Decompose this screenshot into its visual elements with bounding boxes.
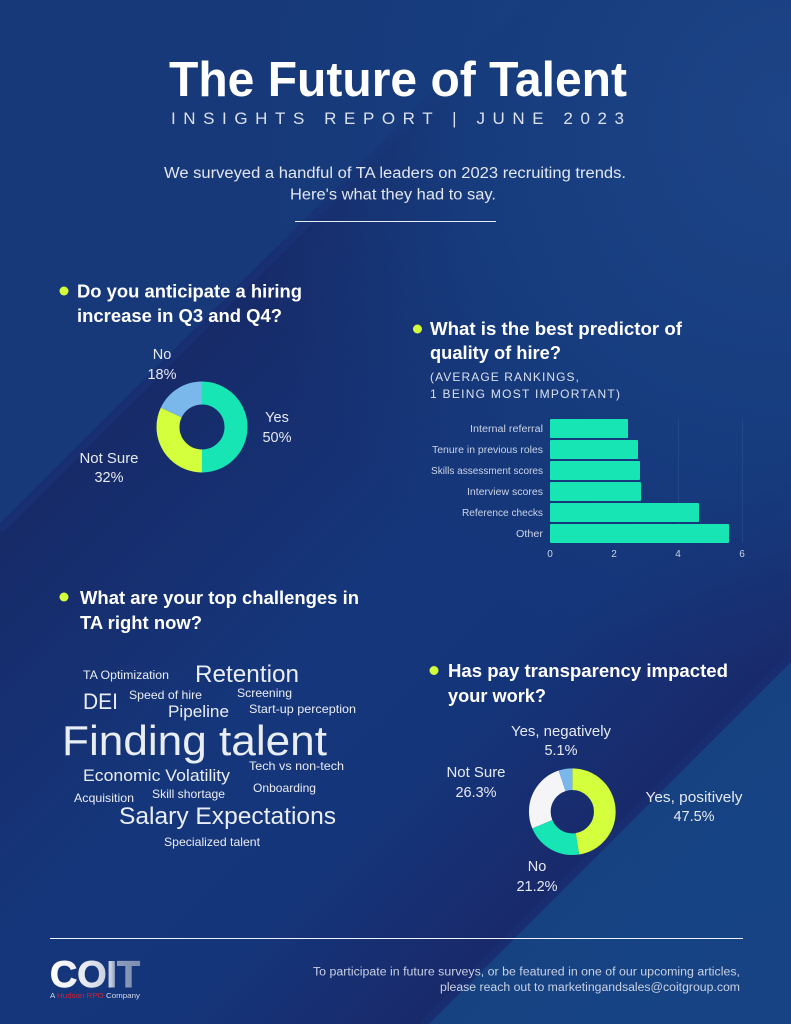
footer divider xyxy=(50,938,743,939)
bar chart: 0 xyxy=(547,549,553,560)
word cloud: Economic Volatility xyxy=(83,766,231,785)
labels: No xyxy=(528,859,546,875)
note: 1 BEING MOST IMPORTANT) xyxy=(430,387,620,401)
bullet xyxy=(60,592,68,602)
word cloud: Tech vs non-tech xyxy=(249,759,344,773)
logo wordmark: COIT xyxy=(50,954,140,995)
intro text xyxy=(164,165,626,204)
word cloud: Onboarding xyxy=(253,781,316,795)
labels: Yes, positively xyxy=(646,790,743,806)
note: (AVERAGE RANKINGS, xyxy=(430,370,579,384)
bar chart: Interview scores xyxy=(467,487,543,498)
heading: Do you anticipate a hiring xyxy=(77,282,302,302)
labels: 26.3% xyxy=(455,785,497,801)
word cloud: Skill shortage xyxy=(152,787,225,801)
bullet xyxy=(60,286,68,296)
bar chart: Tenure in previous roles xyxy=(432,445,543,456)
intro text: We surveyed a handful of TA leaders on 2023 recruiting trends. xyxy=(164,165,626,182)
bullet xyxy=(430,666,438,675)
bar chart: Internal referral xyxy=(470,424,543,435)
labels: 47.5% xyxy=(673,809,715,825)
heading: TA right now? xyxy=(80,613,202,633)
labels xyxy=(80,347,292,486)
bar chart: Skills assessment scores xyxy=(431,466,543,477)
bar chart xyxy=(431,419,745,560)
labels: 5.1% xyxy=(544,743,578,759)
logo xyxy=(50,954,140,1000)
word cloud: Specialized talent xyxy=(164,835,261,849)
footer text: To participate in future surveys, or be featured in one of our upcoming articles, xyxy=(313,966,740,978)
panel: hiring increase xyxy=(60,282,302,486)
labels: Not Sure xyxy=(446,765,506,781)
title: The Future of Talent xyxy=(169,53,627,107)
bar chart: Other xyxy=(516,529,544,540)
word cloud: Retention xyxy=(195,661,299,688)
labels xyxy=(446,724,743,895)
labels: 50% xyxy=(262,430,292,446)
labels: No xyxy=(153,347,171,363)
heading: quality of hire? xyxy=(430,343,561,363)
subtitle: INSIGHTS REPORT | JUNE 2023 xyxy=(171,109,624,128)
logo tagline: A Hudson RPO Company xyxy=(50,991,140,1000)
heading: increase in Q3 and Q4? xyxy=(77,306,282,326)
word cloud xyxy=(62,661,356,849)
labels: Not Sure xyxy=(80,451,138,467)
word cloud: Screening xyxy=(237,686,292,700)
word cloud: Speed of hire xyxy=(129,688,202,702)
word cloud: Start-up perception xyxy=(249,702,356,716)
word cloud: DEI xyxy=(83,689,118,714)
heading: What are your top challenges in xyxy=(80,588,359,608)
footer text: please reach out to marketingandsales@coitgroup.com xyxy=(440,982,740,994)
heading: What is the best predictor of xyxy=(430,319,683,339)
word cloud: Salary Expectations xyxy=(119,803,336,830)
panel: top challenges xyxy=(60,588,359,849)
donut chart xyxy=(540,779,605,844)
bar chart: 4 xyxy=(675,549,681,560)
heading: Has pay transparency impacted xyxy=(448,661,728,681)
word cloud: TA Optimization xyxy=(83,670,169,682)
word cloud: Acquisition xyxy=(74,791,134,805)
intro text: Here's what they had to say. xyxy=(290,186,496,204)
bar chart: 2 xyxy=(611,549,617,560)
labels: Yes, negatively xyxy=(511,724,612,740)
word cloud: Finding talent xyxy=(62,717,327,764)
panel: predictor of quality of hire xyxy=(413,319,745,560)
panel: pay transparency xyxy=(430,661,743,895)
bar chart: Reference checks xyxy=(462,508,543,519)
labels: 21.2% xyxy=(516,879,558,895)
bar chart: 6 xyxy=(739,549,745,560)
labels: 32% xyxy=(94,470,124,486)
labels: Yes xyxy=(265,410,289,426)
bullet xyxy=(413,324,422,334)
labels: 18% xyxy=(147,367,177,383)
intro divider xyxy=(295,221,496,222)
heading: your work? xyxy=(448,686,546,706)
word cloud: Pipeline xyxy=(168,702,229,721)
donut chart xyxy=(168,393,236,461)
